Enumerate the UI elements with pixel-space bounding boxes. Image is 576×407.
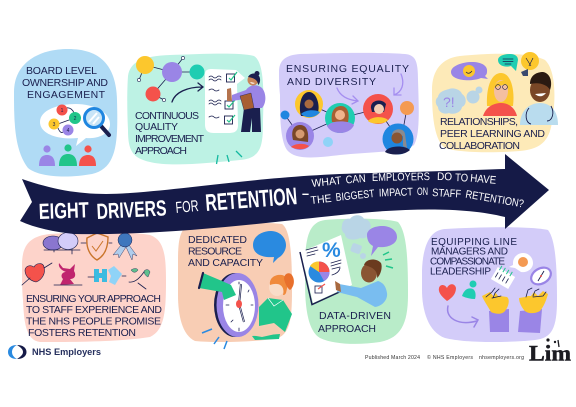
- heading: equipping line managers: EQUIPPING LINE: [431, 237, 517, 248]
- subtitle: what can employers do: CAN: [345, 173, 366, 186]
- logo: NHS Employers: NHS Employers: [32, 347, 101, 358]
- portrait: woman in yellow circle: [295, 90, 323, 118]
- footer: publication details: © NHS Employers: [427, 354, 473, 361]
- heading: continuous quality: CONTINUOUS: [135, 110, 199, 122]
- heading: relationships: COLLABORATION: [439, 140, 520, 152]
- heading: board level: [22, 65, 108, 101]
- icon: question cloud: ?!: [443, 94, 455, 110]
- icon: rosette: [113, 233, 137, 260]
- heading: ensuring your approach: [26, 293, 162, 339]
- portrait: woman in purple circle: [286, 122, 314, 150]
- icon: pink figure: [54, 263, 82, 285]
- figure: doctor with stethoscope: [520, 72, 558, 125]
- portrait: woman in blue circle: [382, 124, 414, 154]
- subtitle: what can employers do: DO: [437, 171, 453, 183]
- title: eight drivers for retention: FOR: [175, 198, 199, 217]
- icon: magnifying glass: [84, 108, 109, 135]
- icon: purple speech bubble: [367, 226, 397, 256]
- icon: teal ticks: [216, 151, 242, 164]
- icon: speech bubble with numbered steps: 1: [61, 108, 64, 114]
- heading: relationships: PEER LEARNING AND: [440, 128, 545, 140]
- heading: continuous quality: APPROACH: [135, 145, 187, 157]
- icon: speech bubble with numbered steps: 3: [53, 122, 56, 128]
- heading: relationships: RELATIONSHIPS,: [440, 116, 518, 128]
- arrow: green into clock: [199, 273, 236, 300]
- logo: Lim: Lim: [529, 340, 571, 366]
- heading: ensuring your approach: TO STAFF EXPERIENCE AND: [26, 304, 162, 316]
- arrows: lavender curved: [337, 74, 403, 104]
- title: eight drivers for retention: [38, 183, 309, 224]
- icon: heart: [439, 284, 456, 301]
- figure: woman with red hair: [250, 273, 294, 340]
- heading: equipping line managers: LEADERSHIP: [430, 266, 491, 278]
- icon: teal message bubble: [498, 54, 518, 71]
- heading: board level: ENGAGEMENT: [27, 89, 106, 101]
- panel: data-driven approach: [300, 215, 408, 344]
- panel: equality and diversity: [279, 53, 419, 157]
- subtitle: what can employers do: IMPACT: [379, 186, 413, 199]
- icon: open hands: [482, 288, 548, 333]
- portrait: woman in teal circle: [325, 103, 355, 133]
- panel: equipping line managers: [422, 227, 557, 342]
- icon: speech bubble with numbered steps: [40, 104, 110, 146]
- heading: ensuring your approach: ENSURING YOUR APPROACH: [26, 293, 161, 305]
- heading: equipping line managers: MANAGERS AND: [431, 246, 508, 258]
- footer: publication details: [365, 354, 524, 361]
- panel: dedicated resource: [178, 223, 294, 349]
- panel: board level ownership: [14, 49, 117, 176]
- figure: man pointing: [335, 259, 387, 307]
- icon: light bulb: [521, 52, 539, 76]
- subtitle: what can employers do: ON: [417, 186, 428, 198]
- figure: woman with clipboard: [227, 71, 265, 132]
- heading: ensuring equality: [286, 63, 409, 88]
- heading: ensuring equality: AND DIVERSITY: [287, 76, 376, 88]
- heading: ensuring equality: ENSURING EQUALITY: [286, 63, 409, 75]
- icon: checklist board: [205, 69, 245, 133]
- panel: relationships and peer learning: [432, 52, 558, 152]
- footer: publication details: Published March 2024: [365, 355, 420, 361]
- icon: connected people network: [280, 90, 414, 154]
- title: eight drivers for retention: EIGHT: [38, 197, 90, 224]
- heading: data-driven: DATA-DRIVEN: [319, 310, 391, 322]
- panel: continuous quality improvement: [127, 54, 265, 164]
- icon: network of nodes: [136, 56, 204, 102]
- subtitle: what can employers do: EMPLOYERS: [372, 171, 430, 184]
- icon: blue ticks: [202, 329, 227, 349]
- heading: continuous quality: [135, 110, 205, 157]
- icon: green ticks: [383, 252, 393, 268]
- icon: report document: %: [322, 239, 341, 262]
- icon: compass: [528, 264, 554, 288]
- heading: board level: OWNERSHIP AND: [22, 77, 108, 89]
- subtitle: what can employers do: RETENTION?: [464, 189, 525, 210]
- heading: data-driven: APPROACH: [318, 323, 376, 335]
- icon: smile bubble: [509, 253, 533, 272]
- icon: teal person: [462, 280, 476, 299]
- title: eight drivers for retention: RETENTION: [204, 183, 298, 217]
- heading: dedicated resource: RESOURCE: [188, 246, 242, 258]
- icon: grey cloud: [342, 215, 371, 259]
- arrow: lavender curved: [448, 306, 478, 327]
- icon: sprout: [129, 268, 150, 289]
- banner: arrow with title: [20, 154, 549, 234]
- heading: relationships: [439, 116, 545, 152]
- subtitle: what can employers do: STAFF: [432, 187, 462, 201]
- logo: NHS Employers: [8, 345, 101, 359]
- heading: equipping line managers: COMPASSIONATE: [430, 256, 505, 268]
- icon: speech bubbles: [43, 232, 80, 254]
- title: eight drivers for retention: –: [302, 185, 309, 201]
- icon: three people: [39, 144, 96, 166]
- icon: shield with tick: [81, 233, 112, 260]
- icon: puzzle pieces: [88, 266, 126, 285]
- icon: purple smile bubble: [451, 62, 488, 80]
- subtitle: what can employers do: TO: [455, 172, 469, 184]
- subtitle: what can employers do: WHAT: [311, 175, 342, 190]
- icon: notepad: [491, 264, 517, 289]
- figure: blonde woman: [483, 73, 517, 116]
- heading: ensuring your approach: THE NHS PEOPLE PROMISE: [26, 316, 161, 328]
- heading: dedicated resource: DEDICATED: [188, 234, 247, 246]
- heading: dedicated resource: [188, 234, 263, 269]
- subtitle: what can employers do: HAVE: [470, 173, 497, 187]
- icon: speech bubble with numbered steps: 4: [67, 128, 70, 134]
- heading: continuous quality: QUALITY: [135, 121, 178, 133]
- subtitle: what can employers do: BIGGEST: [335, 188, 375, 204]
- subtitle: what can employers do: [310, 171, 525, 210]
- heading: data-driven: [318, 310, 391, 335]
- arrow: curved to checklist: [172, 83, 203, 102]
- heading: ensuring your approach: FOSTERS RETENTION: [28, 327, 136, 339]
- heading: board level: BOARD LEVEL: [26, 65, 97, 77]
- icon: speech bubble with numbered steps: 2: [74, 116, 77, 122]
- panel: staff experience and NHS people promise: [22, 232, 166, 342]
- heading: continuous quality: IMPROVEMENT: [135, 133, 205, 145]
- footer: publication details: nhsemployers.org: [479, 355, 524, 361]
- icon: clock: [214, 273, 258, 337]
- portrait: woman in red circle: [363, 94, 393, 124]
- subtitle: what can employers do: THE: [310, 193, 332, 207]
- heading: dedicated resource: AND CAPACITY: [188, 257, 263, 269]
- icon: blue speech bubble: [253, 231, 286, 263]
- title: eight drivers for retention: DRIVERS: [96, 195, 167, 224]
- icon: heart: [22, 263, 52, 285]
- heading: equipping line managers: [430, 237, 517, 278]
